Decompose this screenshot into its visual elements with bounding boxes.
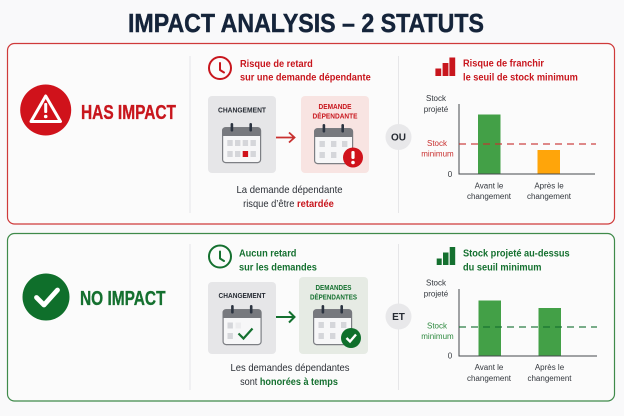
icon: calendar with check badge <box>313 305 361 348</box>
box: changement: CHANGEMENT <box>218 106 267 114</box>
box: demandes dependantes: DEMANDES <box>316 283 352 292</box>
badge: OU <box>386 124 412 150</box>
heading: stock risk <box>463 58 578 84</box>
bar chart: has impact: changement <box>467 192 512 201</box>
box: demandes dependantes: DÉPENDANTES <box>310 292 357 302</box>
heading: stock risk: Risque de franchir <box>463 58 544 70</box>
heading: stock above: du seuil minimum <box>463 262 542 274</box>
icon: calendar with red day <box>222 123 261 163</box>
heading: no delay: sur les demandes <box>239 262 317 274</box>
heading: has impact: HAS IMPACT <box>81 102 176 124</box>
arrow: green <box>276 312 294 322</box>
bar chart: no impact: Après le <box>535 363 565 372</box>
bar chart: has impact: 0 <box>448 170 453 179</box>
heading: stock above: Stock projeté au-dessus <box>463 248 570 260</box>
icon: calendar with check <box>222 305 262 345</box>
caption: on time <box>230 363 350 388</box>
heading: no delay <box>239 248 317 274</box>
bar chart: has impact: minimum <box>421 150 454 158</box>
heading: delay risk: sur une demande dépendante <box>240 72 371 84</box>
caption: on time: Les demandes dépendantes <box>230 363 350 374</box>
arrow: red <box>276 132 294 142</box>
bar chart: no impact: changement <box>527 374 572 383</box>
bar chart: no impact <box>421 278 597 383</box>
bar chart: has impact <box>421 94 596 201</box>
heading: stock risk: le seuil de stock minimum <box>463 72 578 84</box>
box: demande dependante: DEMANDE <box>318 102 352 111</box>
bar chart: has impact: Stock <box>427 139 448 148</box>
badge: OU: OU <box>391 133 406 144</box>
panel: has impact <box>8 44 614 224</box>
badge: ET <box>386 304 412 330</box>
bar chart: no impact: changement <box>467 374 512 383</box>
bar chart: has impact: Avant le <box>475 182 504 190</box>
box: demande dependante <box>301 96 369 173</box>
bar chart: has impact: Stock <box>426 94 447 103</box>
box: demandes dependantes <box>299 277 368 354</box>
bar chart: no impact: Stock <box>427 322 448 330</box>
box: changement: CHANGEMENT <box>218 291 266 300</box>
icon: warning <box>20 84 71 136</box>
panel: no impact <box>8 234 614 401</box>
icon: clock <box>209 57 231 79</box>
box: changement <box>208 282 276 354</box>
heading: no delay: Aucun retard <box>239 248 296 260</box>
heading: no impact: NO IMPACT <box>80 288 166 310</box>
title: IMPACT ANALYSIS – 2 STATUTS <box>128 8 484 38</box>
bar chart: has impact: Après le <box>534 182 564 190</box>
heading: delay risk <box>240 59 371 84</box>
badge: ET: ET <box>392 312 405 323</box>
box: changement <box>208 96 276 173</box>
icon: calendar with alert <box>314 124 363 168</box>
icon: bars red <box>435 58 455 76</box>
caption: delay <box>236 185 343 210</box>
bar chart: has impact: projeté <box>424 105 449 114</box>
caption: on time: sont honorées à temps <box>240 376 338 388</box>
icon: check <box>22 274 70 320</box>
bar chart: no impact: minimum <box>421 332 454 341</box>
bar chart: no impact: projeté <box>424 290 449 298</box>
box: demande dependante: DÉPENDANTE <box>312 112 358 120</box>
heading: stock above <box>463 248 570 274</box>
caption: delay: La demande dépendante <box>236 185 343 196</box>
bar chart: no impact: 0 <box>448 352 453 360</box>
bar chart: no impact: Avant le <box>475 363 504 372</box>
bar chart: has impact: changement <box>527 192 572 201</box>
heading: delay risk: Risque de retard <box>240 59 313 70</box>
caption: delay: risque d’être retardée <box>243 199 334 210</box>
icon: clock <box>209 246 231 268</box>
icon: bars green <box>437 247 455 265</box>
bar chart: no impact: Stock <box>426 278 447 288</box>
